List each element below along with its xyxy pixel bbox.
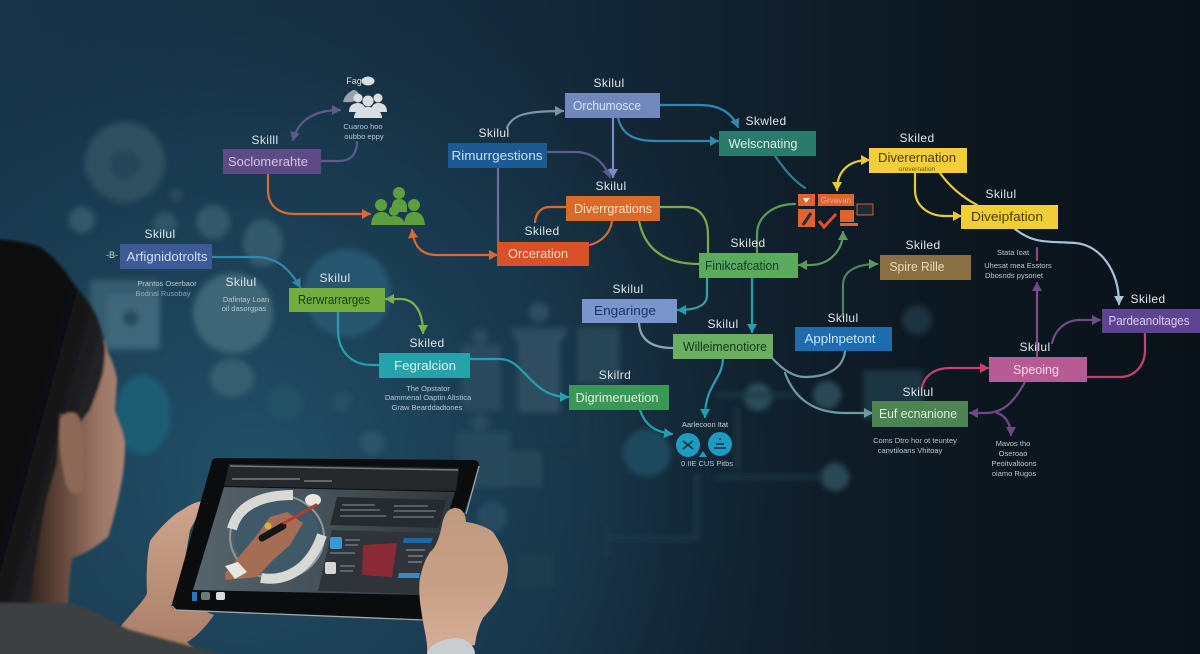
- node: Orceration: Skiled: [524, 224, 560, 238]
- connector: orange left of Diverrgrations: [535, 207, 566, 222]
- node: Diverernation: Skiled: [899, 131, 935, 145]
- node: Digrimeruetion: Skilrd: [599, 368, 631, 382]
- node: Finikcafcation: Skiled: [730, 236, 766, 250]
- node: Spire Rille: Spire Rille: [890, 260, 945, 274]
- arrow: teal to Engaringe: [678, 278, 707, 310]
- caption: Diveipfation note: [984, 248, 1052, 280]
- node: Orceration: [497, 224, 589, 266]
- connector: purple box to caption: [321, 142, 357, 161]
- caption: team note: [343, 122, 384, 141]
- tablet screen: [193, 487, 455, 595]
- node: Rerwrarrarges: [289, 271, 385, 312]
- tablet body: [172, 458, 479, 620]
- node: Welscnating: [719, 114, 816, 156]
- arrow: light blue to Pardeanoltages: [1015, 229, 1119, 304]
- tablet: [172, 458, 479, 620]
- arrow: purple to Euf: [970, 382, 1025, 413]
- node: Willeimenotiore: Skilul: [707, 317, 739, 331]
- node: Diveipfation: Diveipfation: [971, 210, 1043, 224]
- lower right panel: [318, 530, 440, 594]
- node: Digrimeruetion: [569, 368, 669, 410]
- neck and face: [0, 340, 125, 610]
- node: Rimurrgestions: Skilul: [478, 126, 510, 140]
- screen red card: [362, 543, 397, 577]
- arrow: blue upper to Welscnating: [660, 105, 738, 127]
- node: Finikcafcation: Finikcafcation: [705, 259, 779, 273]
- arrow: orange double to team icon and Oreration: [412, 230, 497, 255]
- node: Euf ecnanione: [872, 385, 968, 427]
- node: Diverernation: Diverernation: [878, 151, 956, 165]
- ear: [59, 412, 84, 494]
- arrow: blue to Rerwarrarges: [212, 257, 300, 287]
- connector: green upper: [660, 207, 708, 253]
- connector: purple upper tick: [1036, 248, 1038, 260]
- node: Finikcafcation: [699, 236, 798, 278]
- caption: left skill note: Dafintay Loan: [223, 295, 269, 304]
- node: Speoing: Speoing: [1013, 363, 1059, 377]
- caption: team note: Cuaroo hoo: [343, 122, 383, 131]
- dial ring: [230, 494, 324, 579]
- icon: blue circle pair: [676, 420, 733, 468]
- person: head and shoulders: [0, 238, 220, 654]
- caption: Arfignidotrolts note: Prantos Oserbaor: [137, 279, 197, 288]
- caption: team note: oubbo eppy: [344, 132, 384, 141]
- caption: Arfignidotrolts note: [135, 279, 197, 298]
- hand: right gripping tablet: [419, 508, 508, 654]
- node: Diveipfation: Skilul: [985, 187, 1017, 201]
- caption: Fegralcion note: The Opstator: [406, 384, 450, 393]
- tablet edge highlights: [172, 466, 479, 620]
- node: Spire Rille: Skiled: [905, 238, 941, 252]
- icon: blue circle pair: 0 IIE CUS Pitbs: [681, 459, 733, 468]
- node: Rerwrarrarges: Skilul: [319, 271, 351, 285]
- shirt cuff: [427, 638, 475, 654]
- node: Speoing: [989, 340, 1087, 382]
- caption: Diveipfation note: Uhesat mea Esstors: [984, 261, 1052, 270]
- arrow: teal to circular icons: [705, 359, 723, 417]
- caption: Euf note: [873, 436, 957, 455]
- node: Orchumosce: [565, 76, 660, 118]
- arrow: lavender vertical: [612, 118, 614, 177]
- node: Willeimenotiore: Willeimenotiore: [683, 340, 767, 354]
- arrow: green to Spire: [843, 264, 877, 317]
- node: Diverernation: [869, 131, 967, 173]
- caption: Diveipfation note: Dbosnds pysonet: [985, 271, 1044, 280]
- node: Soclomerahte: Soclomerahte: [228, 155, 308, 169]
- node: Engaringe: Skilul: [612, 282, 644, 296]
- arrow: grey to Orchumosce: [507, 111, 563, 128]
- node: Engaringe: Engaringe: [594, 304, 656, 318]
- hand: left behind tablet: [110, 502, 214, 654]
- icon: white team with speech bubble: Fag: [346, 76, 362, 86]
- icon: blue circle pair: Aarlecoon Itat: [682, 420, 729, 429]
- connector: yellow diagonal: [940, 173, 977, 205]
- node: Arfignidotrolts: Skilul: [144, 227, 176, 241]
- node: Rimurrgestions: [448, 126, 547, 168]
- node: Pardeanoltages: Skiled: [1130, 292, 1166, 306]
- node: Pardeanoltages: [1102, 292, 1200, 333]
- node: Spire Rille: [880, 238, 971, 280]
- node: Rimurrgestions: Rimurrgestions: [452, 149, 542, 163]
- node: Orchumosce: Orchumosce: [573, 99, 641, 113]
- node: Digrimeruetion: Digrimeruetion: [576, 391, 659, 405]
- connector: grey Engaringe to Willeimenotiore: [639, 323, 673, 348]
- hair: [0, 238, 105, 610]
- connector: green to orange icons: [757, 204, 795, 253]
- arrow: purple to Pardeanoltages: [1052, 320, 1100, 343]
- connector: teal to Fegration: [338, 312, 379, 365]
- connectors: [212, 105, 1145, 435]
- caption: Euf note: Coms Dtro hor ot teuntey: [873, 436, 957, 445]
- node: Willeimenotiore: [673, 317, 773, 359]
- bottom dock icons: [192, 592, 225, 601]
- node: Orceration: Orceration: [508, 247, 568, 261]
- caption: Fegralcion note: Dammenal Oaptin Altstica: [385, 393, 472, 402]
- node: Fegralcion: [379, 336, 470, 378]
- caption: Arfignidotrolts note: Bodnal Rusobay: [135, 289, 191, 298]
- screen left cards: [325, 537, 360, 574]
- node: Arfignidotrolts: Arfignidotrolts: [126, 250, 208, 264]
- caption: fork note: oiamo Rugos: [992, 469, 1036, 478]
- node: Pardeanoltages: Pardeanoltages: [1108, 314, 1190, 328]
- arrow: yellow to Diveipfation: [915, 173, 961, 216]
- node: Engaringe: [582, 282, 677, 323]
- node: Euf ecnanione: Euf ecnanione: [879, 407, 957, 421]
- node: Welscnating: Welscnating: [728, 137, 798, 151]
- screen blue buttons: [398, 538, 433, 578]
- arrow: purple upward: [1036, 283, 1038, 357]
- node: Applnpetont: Applnpetont: [804, 332, 876, 346]
- arrow: teal from Digrimeruetion: [640, 410, 672, 434]
- node: Fegralcion: Skiled: [409, 336, 445, 350]
- icon: green team: [371, 187, 425, 225]
- caption: fork note: Peoitvaltoons: [991, 459, 1037, 468]
- arrow: purple to Diverrgrations: [547, 152, 610, 177]
- connector: vertical to Orceration: [497, 168, 499, 242]
- shirt: [0, 603, 220, 654]
- node: Applnpetont: Skilul: [827, 311, 859, 325]
- caption: fork note: [991, 439, 1037, 478]
- node: Arfignidotrolts: [120, 227, 212, 269]
- node: Diverernation: orevernation: [899, 166, 935, 173]
- node: Diveipfation: [961, 187, 1058, 229]
- connector: blue-grey from Applnpetont: [773, 351, 845, 377]
- caption: left skill note: Skilul: [225, 275, 257, 289]
- icon: small gear mark: -B-: [106, 250, 118, 260]
- caption: fork note: Oseroao: [999, 449, 1027, 458]
- node: Rerwrarrarges: Rerwrarrarges: [298, 293, 370, 307]
- node: Euf ecnanione: Skilul: [902, 385, 934, 399]
- icon: white team with speech bubble: [343, 76, 387, 118]
- screen text panel: [330, 497, 446, 528]
- node: Diverrgrations: Skilul: [595, 179, 627, 193]
- arrow: teal to Digrimeruetion: [470, 359, 568, 397]
- arrow: purple fork down: [997, 413, 1011, 435]
- arrow: green double: [386, 299, 423, 333]
- arrow: pink to Speoing: [922, 368, 988, 387]
- node: Fegralcion: Fegralcion: [394, 359, 456, 373]
- blurred background icons: [69, 122, 932, 587]
- tablet top bar: [224, 464, 459, 491]
- icon: orange tools cluster: Grvavan: [821, 196, 851, 205]
- node: Diverrgrations: [566, 179, 660, 221]
- caption: Fegralcion note: Graw Bearddadtones: [392, 403, 463, 412]
- node: Speoing: Skilul: [1019, 340, 1051, 354]
- caption: left skill note: oil dasorgpas: [222, 304, 267, 313]
- node: Orchumosce: Skilul: [593, 76, 625, 90]
- node: Soclomerahte: Skilll: [251, 133, 279, 147]
- node: Applnpetont: [795, 311, 892, 351]
- connector: orange to Orceration: [590, 221, 612, 245]
- top bar details: [230, 466, 458, 481]
- connector: teal to orange icons: [775, 156, 805, 188]
- arrow: green double to icons: [799, 232, 843, 265]
- arrow: blue to Welscnating: [618, 118, 718, 141]
- arrow: grey-teal to Euf: [785, 373, 872, 413]
- icon: orange tools cluster: [798, 194, 873, 227]
- connector: pink to Pardeanoltages: [1087, 333, 1145, 377]
- hand on screen with pen: [225, 505, 316, 580]
- caption: Fegralcion note: [385, 384, 472, 412]
- node: Soclomerahte: [223, 133, 321, 174]
- caption: left skill note: [222, 275, 269, 313]
- arrow: yellow double: [837, 160, 869, 190]
- caption: Diveipfation note: Stata Ioat: [997, 248, 1030, 257]
- connector: green lower: [639, 221, 699, 264]
- caption: Euf note: canvtiloans Vhitoay: [878, 446, 943, 455]
- arrow: teal to Willeimenotiore: [751, 278, 753, 332]
- caption: fork note: Mavos tho: [996, 439, 1030, 448]
- arrow: purple double arc: [293, 110, 340, 140]
- node: Welscnating: Skwled: [745, 114, 787, 128]
- node: Diverrgrations: Diverrgrations: [574, 202, 652, 216]
- arrow: orange to team icon: [268, 174, 370, 214]
